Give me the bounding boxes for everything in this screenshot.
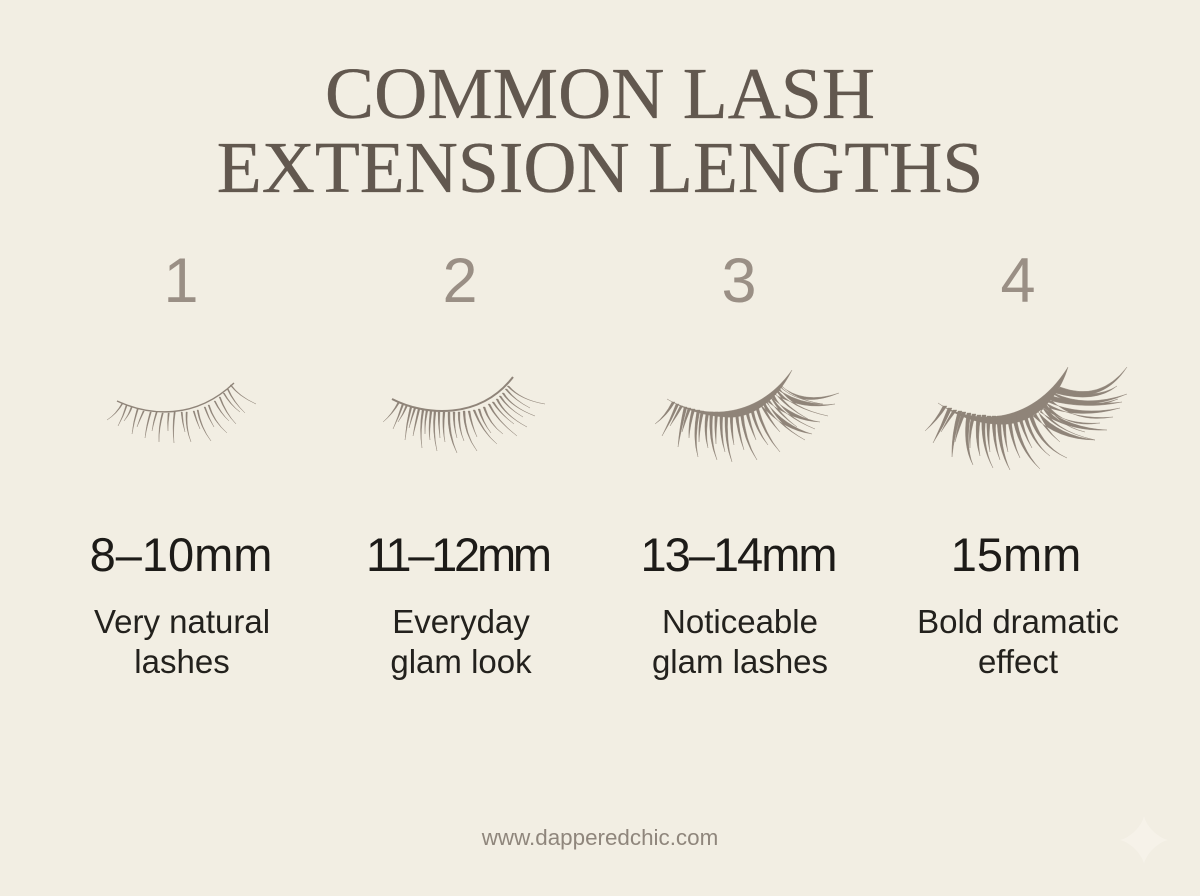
description 2: Everyday xyxy=(392,603,530,640)
number 1: 1 xyxy=(163,246,199,316)
panel: option 3 xyxy=(640,246,839,680)
number 4: 4 xyxy=(1000,246,1036,316)
footer website: www.dapperedchic.com xyxy=(481,825,718,850)
description 1: lashes xyxy=(134,643,230,680)
number 3: 3 xyxy=(721,246,757,316)
number 2: 2 xyxy=(442,246,478,316)
description 3: Noticeable xyxy=(662,603,818,640)
description 4: Bold dramatic xyxy=(917,603,1119,640)
title: EXTENSION LENGTHS xyxy=(217,126,983,208)
icon: sparkle xyxy=(1120,816,1168,864)
description 3: glam lashes xyxy=(652,643,828,680)
panel: option 2 xyxy=(366,246,552,680)
panel: option 1 xyxy=(90,246,272,680)
description 4: effect xyxy=(978,643,1058,680)
description 1: Very natural xyxy=(94,603,270,640)
icon: natural lash xyxy=(107,383,256,443)
panel: option 4 xyxy=(917,246,1127,680)
title: COMMON LASH xyxy=(325,52,875,134)
length 8–10mm: 8–10mm xyxy=(90,528,272,581)
description 2: glam look xyxy=(390,643,532,680)
length 15mm: 15mm xyxy=(951,528,1081,581)
length 11–12mm: 11–12mm xyxy=(366,528,552,581)
icon: everyday lash xyxy=(383,377,545,453)
icon: dramatic lash xyxy=(925,367,1127,470)
icon: glam lash xyxy=(655,370,839,462)
title xyxy=(217,52,983,208)
length 13–14mm: 13–14mm xyxy=(640,528,838,581)
